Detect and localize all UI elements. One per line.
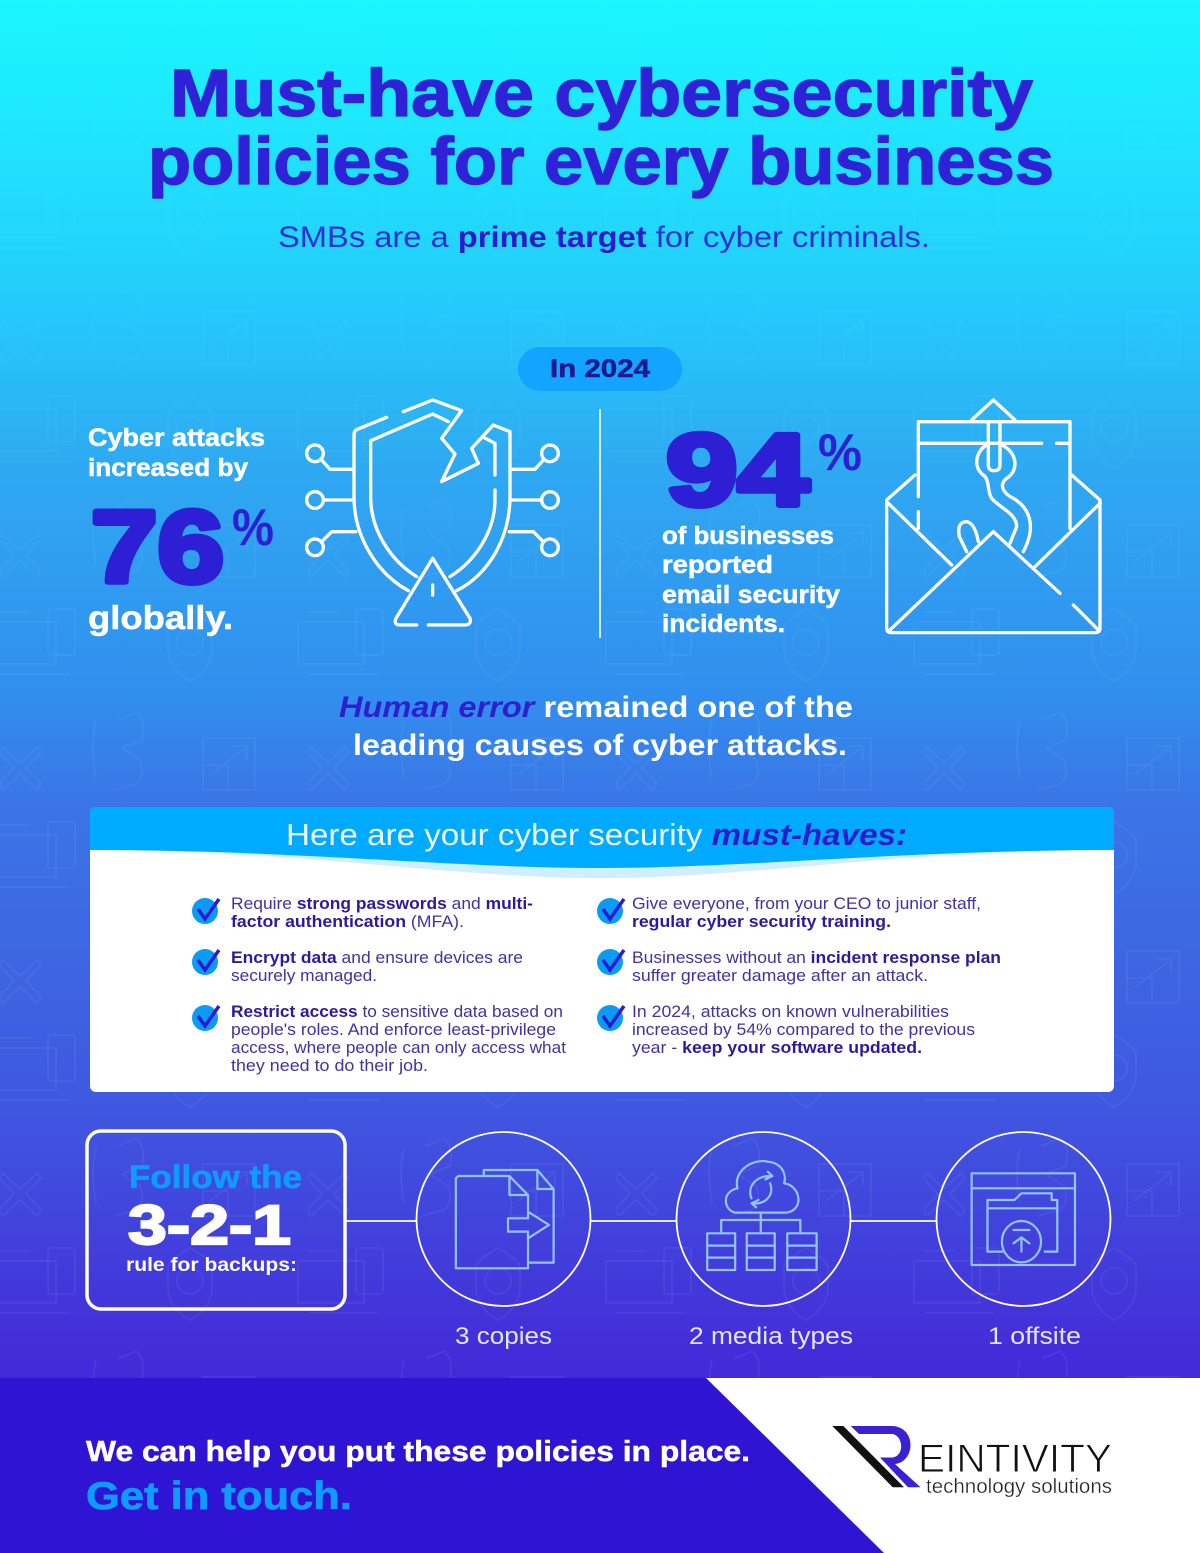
item: software updates <box>597 1003 975 1057</box>
panel heading: Here are your cyber security must-haves: <box>286 817 907 852</box>
item: passwords <box>192 895 533 931</box>
item: restrict access: access, where people can only access what <box>231 1039 566 1057</box>
step: 1 offsite <box>936 1132 1110 1350</box>
call to action: We can help you put these policies in place. <box>86 1436 750 1468</box>
stat: email incidents 94%: email security <box>662 581 840 609</box>
step: 1 offsite: 1 offsite <box>988 1323 1081 1350</box>
step: 2 media types: 2 media types <box>689 1323 853 1350</box>
badge: In 2024: In 2024 <box>550 355 650 383</box>
stat: cyber attacks 76%: Cyber attacks <box>88 424 265 452</box>
statement: human error <box>339 691 853 762</box>
step: 3 copies: 3 copies <box>455 1323 552 1350</box>
item: passwords: factor authentication (MFA). <box>231 913 464 931</box>
panel: must-haves <box>90 807 1114 1092</box>
item: software updates: year - keep your software updated. <box>632 1039 922 1057</box>
statement: human error: leading causes of cyber attacks. <box>353 729 847 762</box>
call to action <box>86 1436 750 1518</box>
callout: 3-2-1 rule: rule for backups: <box>126 1255 297 1276</box>
item: restrict access: they need to do their job. <box>231 1057 428 1075</box>
stat: cyber attacks 76%: globally. <box>88 599 233 636</box>
subtitle: SMBs are a prime target for cyber criminals. <box>278 221 930 254</box>
stat: email incidents 94%: of businesses <box>662 522 834 550</box>
title <box>148 56 1054 199</box>
item: incident response: Businesses without an incident response plan <box>632 949 1001 967</box>
logo: Reintivity: technology solutions <box>926 1476 1112 1498</box>
footer <box>0 1378 1200 1553</box>
title: Must-have cybersecurity <box>170 56 1033 131</box>
step: 3 copies <box>416 1132 590 1350</box>
stat: email incidents 94%: incidents. <box>662 610 785 638</box>
item: restrict access <box>192 1003 566 1075</box>
item: incident response <box>597 949 1001 985</box>
item: training <box>597 895 981 931</box>
stat: cyber attacks 76% <box>88 424 274 636</box>
stat: email incidents 94% <box>662 413 862 638</box>
item: encrypt: Encrypt data and ensure devices are <box>231 949 523 967</box>
icon: broken shield with circuits and warning <box>307 400 558 625</box>
callout: 3-2-1 rule <box>87 1131 345 1309</box>
statement: human error: Human error remained one of the <box>339 691 853 724</box>
stat: email incidents 94%: 94 <box>666 413 809 527</box>
item: incident response: suffer greater damage after an attack. <box>632 967 928 985</box>
stat: cyber attacks 76%: 76 <box>91 490 224 604</box>
item: software updates: In 2024, attacks on known vulnerabilities <box>632 1003 949 1021</box>
item: encrypt <box>192 949 523 985</box>
item: restrict access: people's roles. And enforce least-privilege <box>231 1021 556 1039</box>
step: 2 media types <box>676 1132 853 1350</box>
item: training: Give everyone, from your CEO to junior staff, <box>632 895 981 913</box>
logo: Reintivity <box>832 1426 1112 1498</box>
item: passwords: Require strong passwords and multi- <box>231 895 533 913</box>
badge: In 2024 <box>518 347 682 391</box>
item: training: regular cyber security training. <box>632 913 891 931</box>
logo: Reintivity: EINTIVITY <box>918 1437 1112 1481</box>
callout: 3-2-1 rule: Follow the <box>129 1159 302 1195</box>
item: software updates: increased by 54% compared to the previous <box>632 1021 975 1039</box>
callout: 3-2-1 rule: 3-2-1 <box>128 1193 291 1256</box>
stat: email incidents 94%: reported <box>662 551 773 579</box>
stat: cyber attacks 76%: increased by <box>88 454 248 482</box>
icon: phishing hook in envelope <box>887 400 1100 633</box>
stat: email incidents 94%: % <box>818 424 862 482</box>
call to action: Get in touch. <box>86 1475 352 1518</box>
item: restrict access: Restrict access to sensitive data based on <box>231 1003 563 1021</box>
item: encrypt: securely managed. <box>231 967 377 985</box>
stat: cyber attacks 76%: % <box>232 499 274 557</box>
title: policies for every business <box>148 124 1054 199</box>
